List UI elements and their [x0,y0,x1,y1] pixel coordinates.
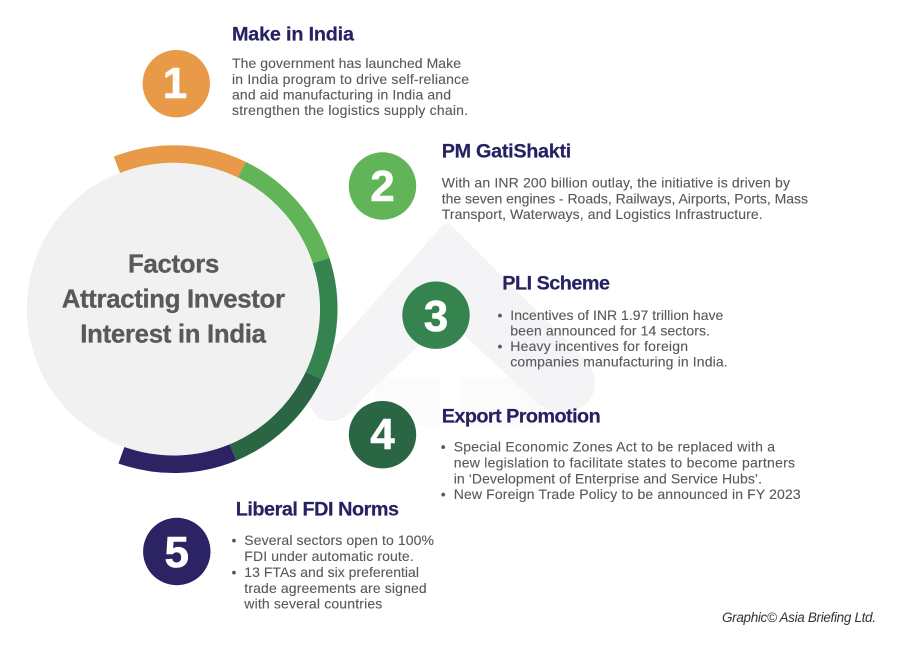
text block: Make in India: strengthen the logistics supply chain. [232,102,468,118]
bullet list: Export Promotion: New Foreign Trade Policy to be announced in FY 2023 [454,486,801,502]
credit line: Graphic© Asia Briefing Ltd. [722,610,876,625]
segmented ring [117,154,329,464]
ring segment 4: dark green [233,376,314,452]
number badge 3: 3 [424,292,448,341]
bullet list: Export Promotion: • [441,486,446,502]
bullet list: Liberal FDI Norms: 13 FTAs and six preferential [244,564,419,580]
heading: Liberal FDI Norms: Liberal FDI Norms [236,499,399,521]
bullet list: PLI Scheme: Incentives of INR 1.97 trillion have [510,307,724,323]
central title [62,251,285,349]
bullet list: Export Promotion: Special Economic Zones Act to be replaced with a [454,439,775,455]
text block: Make in India: and aid manufacturing in India and [232,86,451,102]
text block: Make in India: The government has launched Make [232,55,461,71]
text block: PM GatiShakti: With an INR 200 billion outlay, the initiative is driven by [442,175,790,191]
ring segment 5: navy [121,452,233,464]
bullet list: Liberal FDI Norms: FDI under automatic route. [244,548,414,564]
text block: PM GatiShakti [442,175,808,222]
number badge 1 [143,50,210,117]
heading: Make in India: Make in India [232,24,355,46]
heading: Export Promotion: Export Promotion [442,405,601,427]
bullet list: Liberal FDI Norms [232,532,434,612]
bullet list: Export Promotion: new legislation to facilitate states to become partners [454,455,795,471]
text block: Make in India [232,55,469,118]
number badge 2: 2 [370,162,395,211]
panel: PM GatiShakti [349,141,808,222]
bullet list: Liberal FDI Norms: with several countries [243,596,382,612]
bullet list: PLI Scheme [498,307,728,370]
ring segment 2: light green [242,170,321,261]
central title: Factors [128,251,219,279]
number badge 2 [349,152,416,220]
bullet list: PLI Scheme: been announced for 14 sectors. [510,322,710,338]
heading: PM GatiShakti: PM GatiShakti [442,141,571,163]
number badge 5 [143,518,210,585]
panel: PLI Scheme [402,272,728,370]
bullet list: Liberal FDI Norms: Several sectors open to 100% [244,532,434,548]
number badge 4 [349,401,416,468]
text block: PM GatiShakti: Transport, Waterways, and Logistics Infrastructure. [442,206,763,222]
number badge 3 [402,282,470,349]
bullet list: PLI Scheme: • [498,307,502,323]
panel: Liberal FDI Norms [143,499,434,612]
bullet list: Export Promotion: in ‘Development of Enterprise and Service Hubs’. [454,470,762,486]
background watermark: arrow roof [307,224,595,425]
panel: Make in India [143,24,469,118]
bullet list: Liberal FDI Norms: • [232,532,236,548]
bullet list: Export Promotion: • [441,439,446,455]
number badge 4: 4 [370,410,395,459]
bullet list: PLI Scheme: Heavy incentives for foreign [510,338,688,354]
bullet list: Liberal FDI Norms: • [232,564,236,580]
central title: Interest in India [80,321,267,349]
text block: PM GatiShakti: the seven engines - Roads, Railways, Airports, Ports, Mass [442,190,808,206]
central circle [27,162,320,455]
central title: Attracting Investor [62,286,285,314]
ring segment 3: green [314,261,329,376]
bullet list: PLI Scheme: • [498,338,502,354]
bullet list: Liberal FDI Norms: trade agreements are signed [244,580,427,596]
heading: PLI Scheme: PLI Scheme [502,272,610,294]
bullet list: PLI Scheme: companies manufacturing in India. [510,354,728,370]
text block: Make in India: in India program to drive self-reliance [232,71,469,87]
number badge 5: 5 [165,528,189,577]
number badge 1: 1 [163,59,187,108]
ring segment 1: orange [117,154,242,170]
bullet list: Export Promotion [441,439,801,502]
panel: Export Promotion [349,401,801,502]
